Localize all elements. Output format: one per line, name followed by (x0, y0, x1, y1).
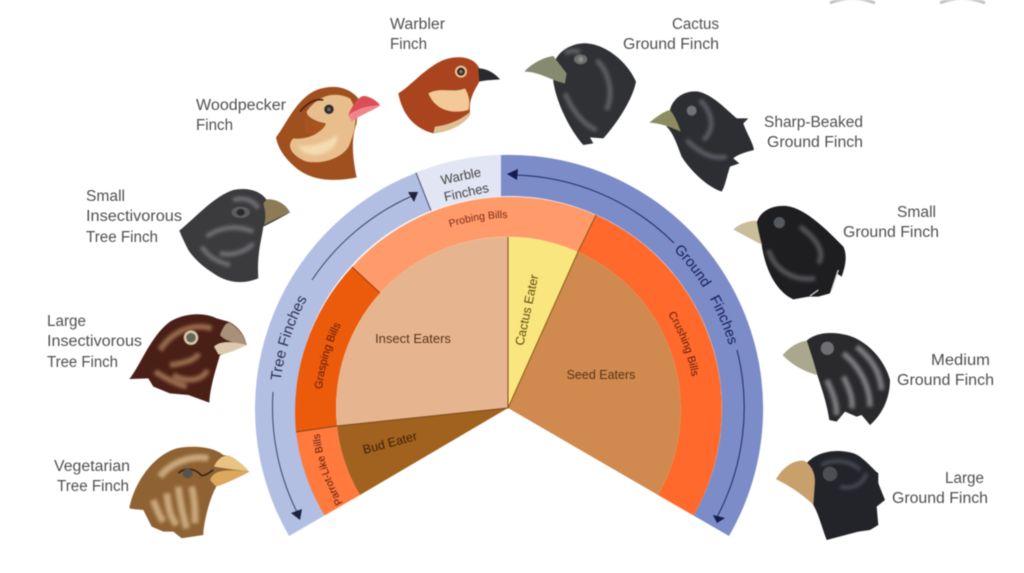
text: medium ground finch: Ground Finch (897, 372, 994, 389)
label: warble finches: Warble (439, 164, 482, 188)
arrow: tree finches up (312, 192, 418, 280)
text: sharp-beaked ground finch: Ground Finch (767, 134, 863, 151)
decorative corner arcs (830, 0, 985, 3)
label: grasping bills: Grasping Bills (314, 322, 341, 389)
bird: small insectivorous tree finch (179, 189, 290, 282)
text: large ground finch: Ground Finch (892, 490, 988, 507)
label: insect eaters: Insect Eaters (375, 331, 451, 346)
text: woodpecker finch: Woodpecker (196, 97, 286, 114)
label: seed eaters: Seed Eaters (567, 368, 635, 382)
sector: bud eater (337, 408, 508, 495)
text: cactus ground finch: Ground Finch (623, 36, 719, 53)
text: sharp-beaked ground finch: Sharp-Beaked (764, 114, 863, 131)
bird: warbler finch (398, 57, 500, 133)
band: tree finches (255, 173, 431, 536)
bird: woodpecker finch (276, 87, 380, 180)
sector: crushing bills (578, 215, 722, 516)
text: small ground finch: Small (897, 204, 936, 221)
text: large ground finch: Large (945, 470, 984, 487)
sector: probing bills (352, 197, 596, 293)
sector: parrot-like bills (296, 426, 360, 516)
band: warble finches (416, 155, 501, 211)
label: cactus eater: Cactus Eater (513, 273, 541, 347)
arrow: ground finches to warble (507, 169, 674, 243)
label: ground finches: Ground Finches (676, 244, 736, 345)
label: probing bills: Probing Bills (448, 210, 508, 228)
text: warbler finch: Warbler (390, 16, 445, 33)
text: cactus ground finch: Cactus (672, 16, 719, 33)
arrow: ground finches down (713, 350, 744, 523)
text: vegetarian tree finch: Tree Finch (57, 478, 129, 495)
text: small insectivorous tree finch: Tree Finch (86, 229, 158, 246)
sector dividing lines (296, 215, 596, 432)
bird: small ground finch (733, 206, 846, 299)
text: small insectivorous tree finch: Small (86, 188, 125, 205)
text: medium ground finch: Medium (931, 352, 990, 369)
text: large insectivorous tree finch: Tree Finch (47, 354, 118, 371)
arrow: tree finches down (272, 392, 302, 520)
text: small insectivorous tree finch: Insectivorous (86, 208, 182, 225)
label: crushing bills: Crushing Bills (668, 311, 699, 377)
text: large insectivorous tree finch: Large (47, 313, 86, 330)
band: ground finches (501, 155, 763, 536)
label: warble finches: Finches (443, 180, 491, 204)
label: bud eater: Bud Eater (361, 429, 419, 457)
bird: sharp-beaked ground finch (649, 91, 754, 192)
sector: grasping bills (295, 267, 380, 432)
semicircle diagram (254, 154, 764, 536)
sector: cactus eater (508, 237, 578, 408)
text: vegetarian tree finch: Vegetarian (54, 458, 130, 475)
bird: medium ground finch (783, 333, 890, 425)
sector: insect eaters (336, 237, 508, 426)
bird: large insectivorous tree finch (129, 314, 247, 403)
text: warbler finch: Finch (390, 36, 427, 53)
bird: cactus ground finch (524, 43, 636, 145)
bird: vegetarian tree finch (129, 447, 249, 538)
text: woodpecker finch: Finch (196, 117, 233, 134)
text: large insectivorous tree finch: Insectivorous (47, 333, 142, 350)
bird: large ground finch (776, 451, 885, 540)
label: parrot-like bills: Parrot-Like Bills (312, 434, 343, 506)
label: tree finches: Tree Finches (270, 296, 307, 380)
divider: tree and warble (416, 173, 431, 211)
text: small ground finch: Ground Finch (843, 224, 939, 241)
sector: seed eaters (508, 252, 681, 495)
